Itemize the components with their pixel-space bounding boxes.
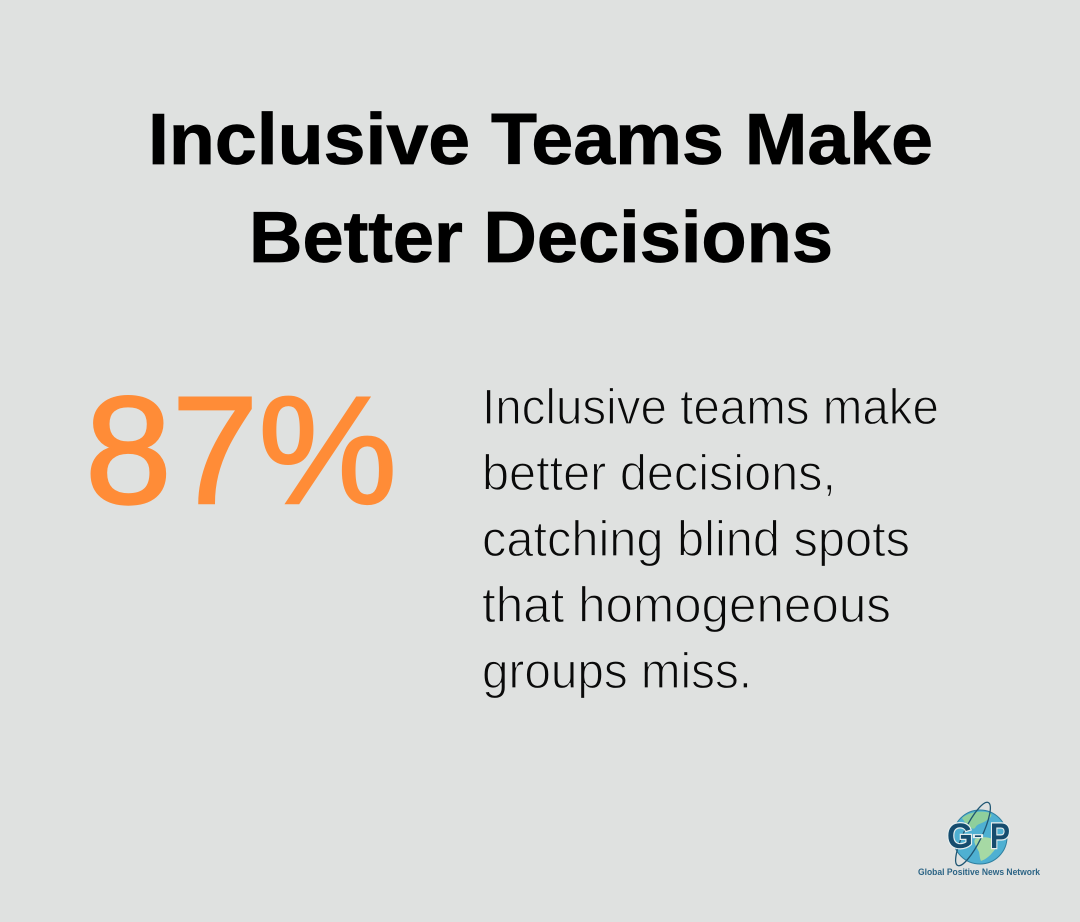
description text: Inclusive teams make — [482, 379, 939, 435]
title: Inclusive Teams Make — [148, 100, 933, 180]
logo letters: G — [947, 817, 973, 856]
description text — [482, 379, 939, 699]
title: Better Decisions — [249, 198, 833, 278]
logo letters: P — [990, 817, 1010, 856]
description text: groups miss. — [482, 643, 752, 699]
statistic: 87%: 87% — [85, 365, 397, 536]
icon: globe — [950, 799, 1007, 869]
logo letters: - — [974, 827, 983, 843]
logo caption: Global Positive News Network — [918, 867, 1041, 877]
logo: Global Positive News Network — [918, 799, 1041, 877]
title — [148, 100, 933, 278]
description text: catching blind spots — [482, 511, 910, 567]
description text: better decisions, — [482, 445, 836, 501]
logo letters — [947, 817, 1010, 856]
description text: that homogeneous — [482, 577, 891, 633]
